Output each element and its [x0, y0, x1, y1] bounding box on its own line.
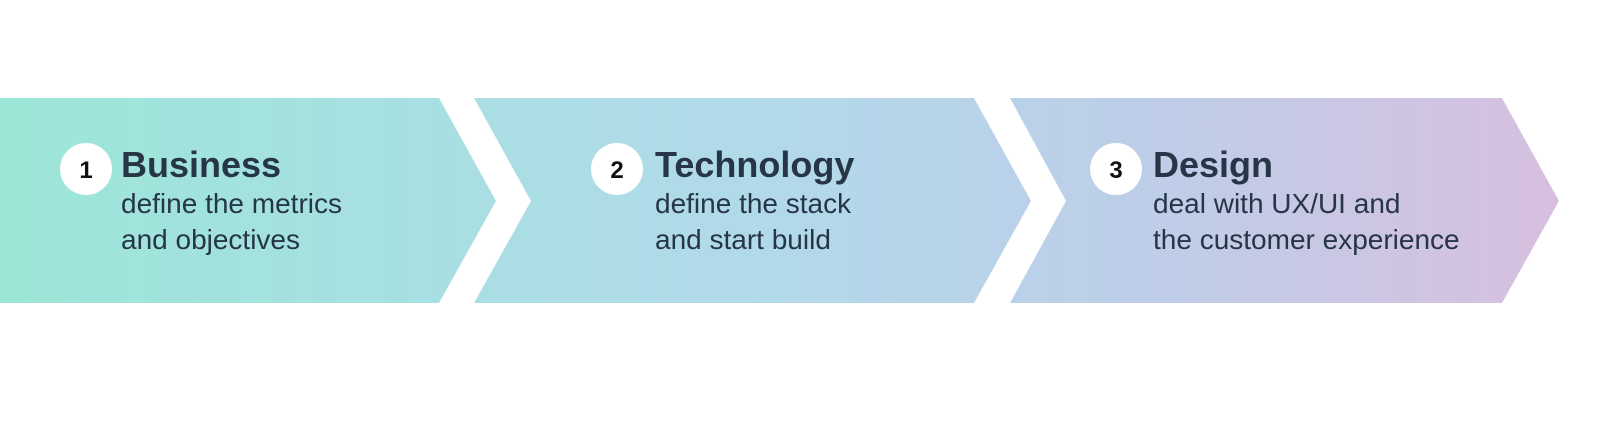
text: technology description: define the stack	[655, 188, 851, 219]
icon: number 2	[591, 143, 643, 195]
icon: number 1: 1	[79, 157, 93, 184]
panel: technology	[474, 98, 1031, 303]
icon: number 3: 3	[1109, 157, 1123, 184]
panel: design	[1010, 98, 1559, 303]
text: design description: the customer experience	[1153, 224, 1460, 255]
heading: Technology: Technology	[655, 144, 854, 185]
text: business description: and objectives	[121, 224, 300, 255]
heading: Business: Business	[121, 144, 281, 185]
icon: number 3	[1090, 143, 1142, 195]
heading: Design: Design	[1153, 144, 1273, 185]
panel: business	[0, 98, 496, 303]
icon: number 1	[60, 143, 112, 195]
text: business description: define the metrics	[121, 188, 342, 219]
text: design description: deal with UX/UI and	[1153, 188, 1400, 219]
text: technology description: and start build	[655, 224, 831, 255]
icon: number 2: 2	[610, 157, 624, 184]
